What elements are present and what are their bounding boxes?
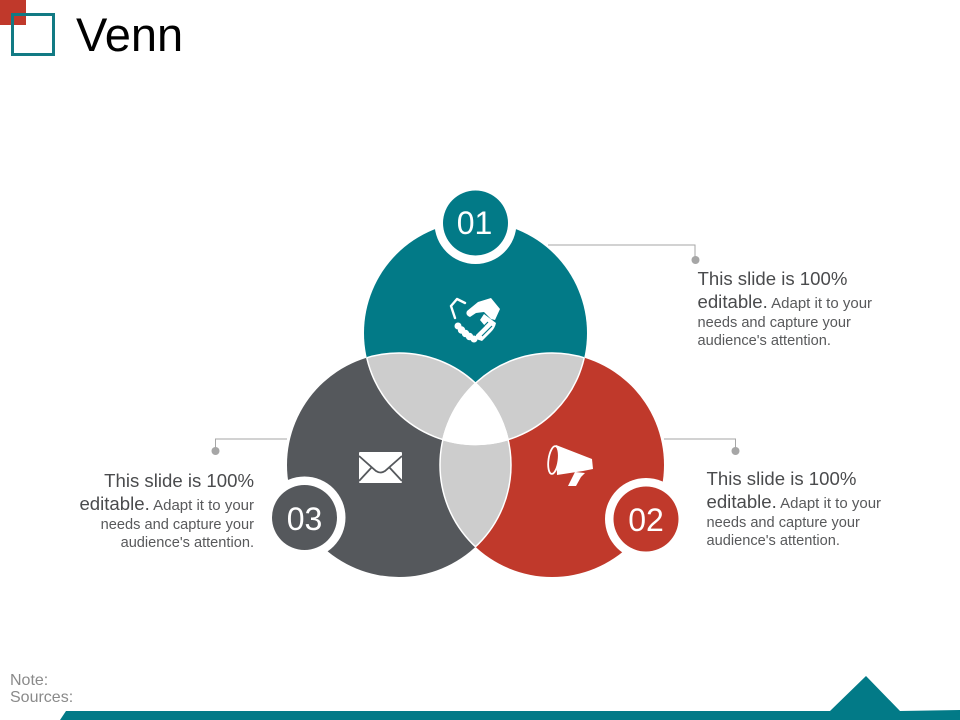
icon: envelope <box>359 452 402 483</box>
leader line: 01 <box>548 245 700 264</box>
overlap outlines <box>366 352 585 548</box>
logo mark <box>0 0 54 54</box>
overlap: teal and gray <box>368 354 474 439</box>
text block: 03 <box>79 470 254 550</box>
badge 03 <box>264 476 346 558</box>
circle: red <box>440 353 664 577</box>
circle: gray <box>287 353 511 577</box>
text block: 03: editable. Adapt it to your <box>79 492 254 514</box>
icon: handshake <box>451 298 500 342</box>
text block: 03: This slide is 100% <box>104 470 254 490</box>
badge 03: 03 <box>287 501 322 537</box>
text block: 01: audience's attention. <box>698 333 831 349</box>
venn diagram <box>287 222 664 577</box>
note and sources: Note: <box>10 672 48 688</box>
text block: 01: needs and capture your <box>698 315 851 331</box>
text block: 02: editable. Adapt it to your <box>706 491 881 512</box>
text block: 02: audience's attention. <box>706 533 840 549</box>
badge 01: 01 <box>457 205 492 241</box>
text block: 02: This slide is 100% <box>706 468 856 489</box>
footer band <box>60 676 960 720</box>
text block: 03: needs and capture your <box>101 516 254 532</box>
note and sources <box>10 672 73 706</box>
text block: 02: needs and capture your <box>706 515 860 531</box>
badge 02: 02 <box>628 502 664 538</box>
overlap: teal and red <box>476 354 584 439</box>
leader line: 02 <box>664 439 740 455</box>
text block: 01: editable. Adapt it to your <box>698 291 872 312</box>
leader line: 03 <box>212 439 287 455</box>
text block: 01: This slide is 100% <box>698 268 847 289</box>
overlap: center <box>444 384 507 444</box>
badge 02 <box>605 478 687 560</box>
badge 01 <box>434 182 516 264</box>
text block: 02 <box>706 468 881 549</box>
icon: megaphone <box>547 445 593 486</box>
overlap: gray and red <box>440 440 510 546</box>
title: Venn <box>76 8 183 61</box>
circle: teal <box>364 222 587 444</box>
text block: 01 <box>698 268 872 349</box>
note and sources: Sources: <box>10 688 73 706</box>
text block: 03: audience's attention. <box>121 534 254 550</box>
